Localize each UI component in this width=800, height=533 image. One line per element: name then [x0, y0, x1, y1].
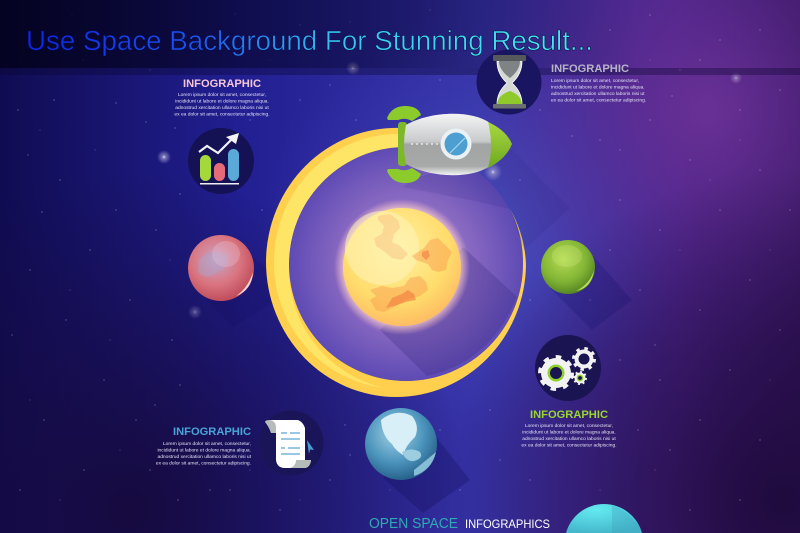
- info block: top right: incididunt ut labore et dolore magna aliqua.: [551, 84, 645, 90]
- info block: bottom left: [156, 426, 252, 466]
- rocket: [387, 106, 570, 250]
- info block: top left: Lorem ipsum dolor sit amet, consectetur,: [178, 92, 266, 98]
- info block: bottom left: INFOGRAPHIC: [173, 426, 251, 438]
- rocket bottom fin: [387, 168, 421, 183]
- sun glow: [334, 199, 470, 335]
- info block: top right: [551, 63, 646, 104]
- rocket window: [440, 128, 472, 160]
- info block: bottom left: adnostrud xercitation ullamco laboris nisi ut: [157, 454, 252, 460]
- trend arrow: [199, 140, 231, 153]
- info block: bottom right: adnostrud xercitation ullamco laboris nisi ut: [522, 436, 616, 442]
- info block: bottom left: incididunt ut labore et dolore magna aliqua.: [157, 448, 251, 454]
- rocket hull: [404, 114, 492, 175]
- footer label: OPEN SPACE: [369, 516, 458, 532]
- orbit ring highlight: [274, 134, 400, 388]
- hourglass icon: [476, 50, 542, 114]
- orbit inner disk: [289, 147, 523, 381]
- info block: top left: adnostrud xercitation ullamco laboris nisi ut: [175, 105, 269, 111]
- chart icon: [188, 128, 254, 194]
- info block: bottom left: ex ea dolor sit amet, consectetur adipiscing.: [156, 460, 251, 466]
- rocket shadow: [403, 150, 570, 250]
- red planet: [188, 235, 254, 301]
- rocket top fin: [387, 106, 421, 121]
- info block: top right: INFOGRAPHIC: [551, 63, 629, 75]
- earth: [365, 408, 470, 513]
- info block: bottom right: Lorem ipsum dolor sit amet, consectetur,: [525, 423, 613, 429]
- cyan planet: [566, 504, 642, 533]
- green planet: [541, 240, 632, 330]
- bars: [200, 155, 211, 181]
- sun highlight: [345, 211, 419, 285]
- info block: top left: incididunt ut labore et dolore magna aliqua.: [175, 98, 269, 104]
- rocket rivets: [411, 143, 438, 145]
- rocket collar: [398, 122, 407, 166]
- title: Use Space Background For Stunning Result...: [26, 25, 593, 56]
- info block: top left: INFOGRAPHIC: [183, 78, 261, 90]
- orbit ring crescent: [266, 128, 526, 397]
- info block: bottom right: incididunt ut labore et dolore magna aliqua.: [522, 430, 616, 436]
- info block: top left: ex ea dolor sit amet, consectetur adipiscing.: [174, 112, 270, 118]
- sun surface patches: [374, 214, 408, 260]
- footer label: [369, 516, 550, 532]
- info block: bottom right: INFOGRAPHIC: [530, 409, 608, 421]
- central orbit system: [266, 128, 526, 397]
- sun long shadow: [380, 247, 517, 376]
- info block: bottom right: ex ea dolor sit amet, consectetur adipiscing.: [521, 442, 617, 448]
- info block: top right: ex ea dolor sit amet, consectetur adipiscing.: [551, 98, 646, 104]
- info block: bottom right: [521, 409, 617, 448]
- cursor: [307, 440, 314, 454]
- info block: bottom left: Lorem ipsum dolor sit amet, consectetur,: [163, 441, 251, 447]
- scroll icon: [258, 410, 324, 476]
- rocket nose: [488, 122, 512, 168]
- info block: top right: Lorem ipsum dolor sit amet, consectetur,: [551, 78, 639, 84]
- info block: top left: [174, 78, 270, 118]
- header band: [0, 0, 800, 75]
- footer label: INFOGRAPHICS: [465, 517, 550, 531]
- info block: top right: adnostrud xercitation ullamco laboris nisi ut: [551, 91, 645, 97]
- red planet shadow: [207, 257, 277, 327]
- baseline: [200, 183, 239, 184]
- sun: [343, 208, 461, 326]
- gears icon: [535, 335, 601, 401]
